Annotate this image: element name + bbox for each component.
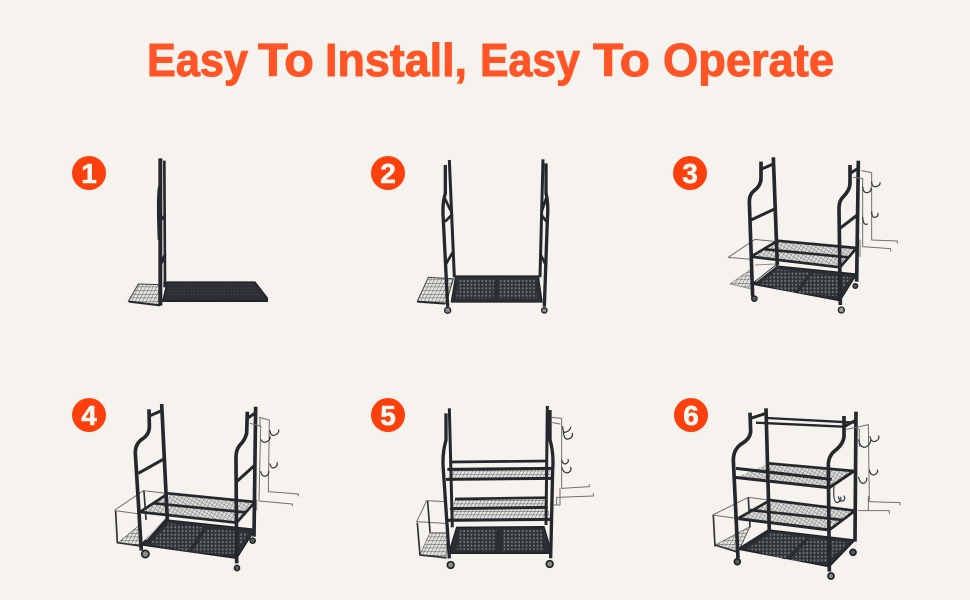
badge 5: 5 <box>380 400 396 431</box>
rack step 1: side frame with flat base and basket <box>128 158 267 306</box>
rack step 2: two side frames on base <box>417 159 548 313</box>
rack step 4: frame with assembled side basket <box>115 404 298 571</box>
title: To <box>258 34 314 86</box>
basket wires <box>728 239 777 289</box>
badge 3 <box>673 156 707 190</box>
rack step 3: side frames, middle shelf, basket panels and hooks <box>728 157 897 313</box>
step 3 <box>673 156 897 313</box>
step 6 <box>674 398 900 579</box>
badge 4 <box>72 398 106 432</box>
rack step 6: fully assembled cart <box>713 408 900 579</box>
badge 3: 3 <box>682 158 698 189</box>
title: To <box>593 34 650 86</box>
badge 6 <box>674 398 708 432</box>
badge 2 <box>371 156 405 190</box>
hooks <box>552 417 593 505</box>
hooks <box>853 171 897 257</box>
title <box>147 34 834 86</box>
side basket <box>115 491 167 547</box>
step 1 <box>72 156 267 306</box>
hooks <box>834 425 900 513</box>
badge 4: 4 <box>81 400 97 431</box>
title: Operate <box>663 34 834 86</box>
wheels <box>142 538 255 571</box>
step 4 <box>72 398 298 571</box>
step 2 <box>371 156 548 313</box>
title: Install, <box>325 34 467 86</box>
wheels <box>752 284 858 313</box>
rack step 5: frontal view with two wire shelves <box>417 406 593 568</box>
step 5 <box>371 398 593 568</box>
badge 2: 2 <box>380 158 396 189</box>
hooks <box>250 417 298 510</box>
side basket <box>417 501 447 558</box>
badge 5 <box>371 398 405 432</box>
badge 1 <box>72 156 106 190</box>
wheels <box>445 307 547 313</box>
badge 1: 1 <box>81 158 97 189</box>
title: Easy <box>147 34 248 86</box>
wheels <box>447 561 553 568</box>
badge 6: 6 <box>683 400 699 431</box>
side basket <box>713 497 769 552</box>
title: Easy <box>480 34 580 86</box>
wheels <box>734 549 856 579</box>
